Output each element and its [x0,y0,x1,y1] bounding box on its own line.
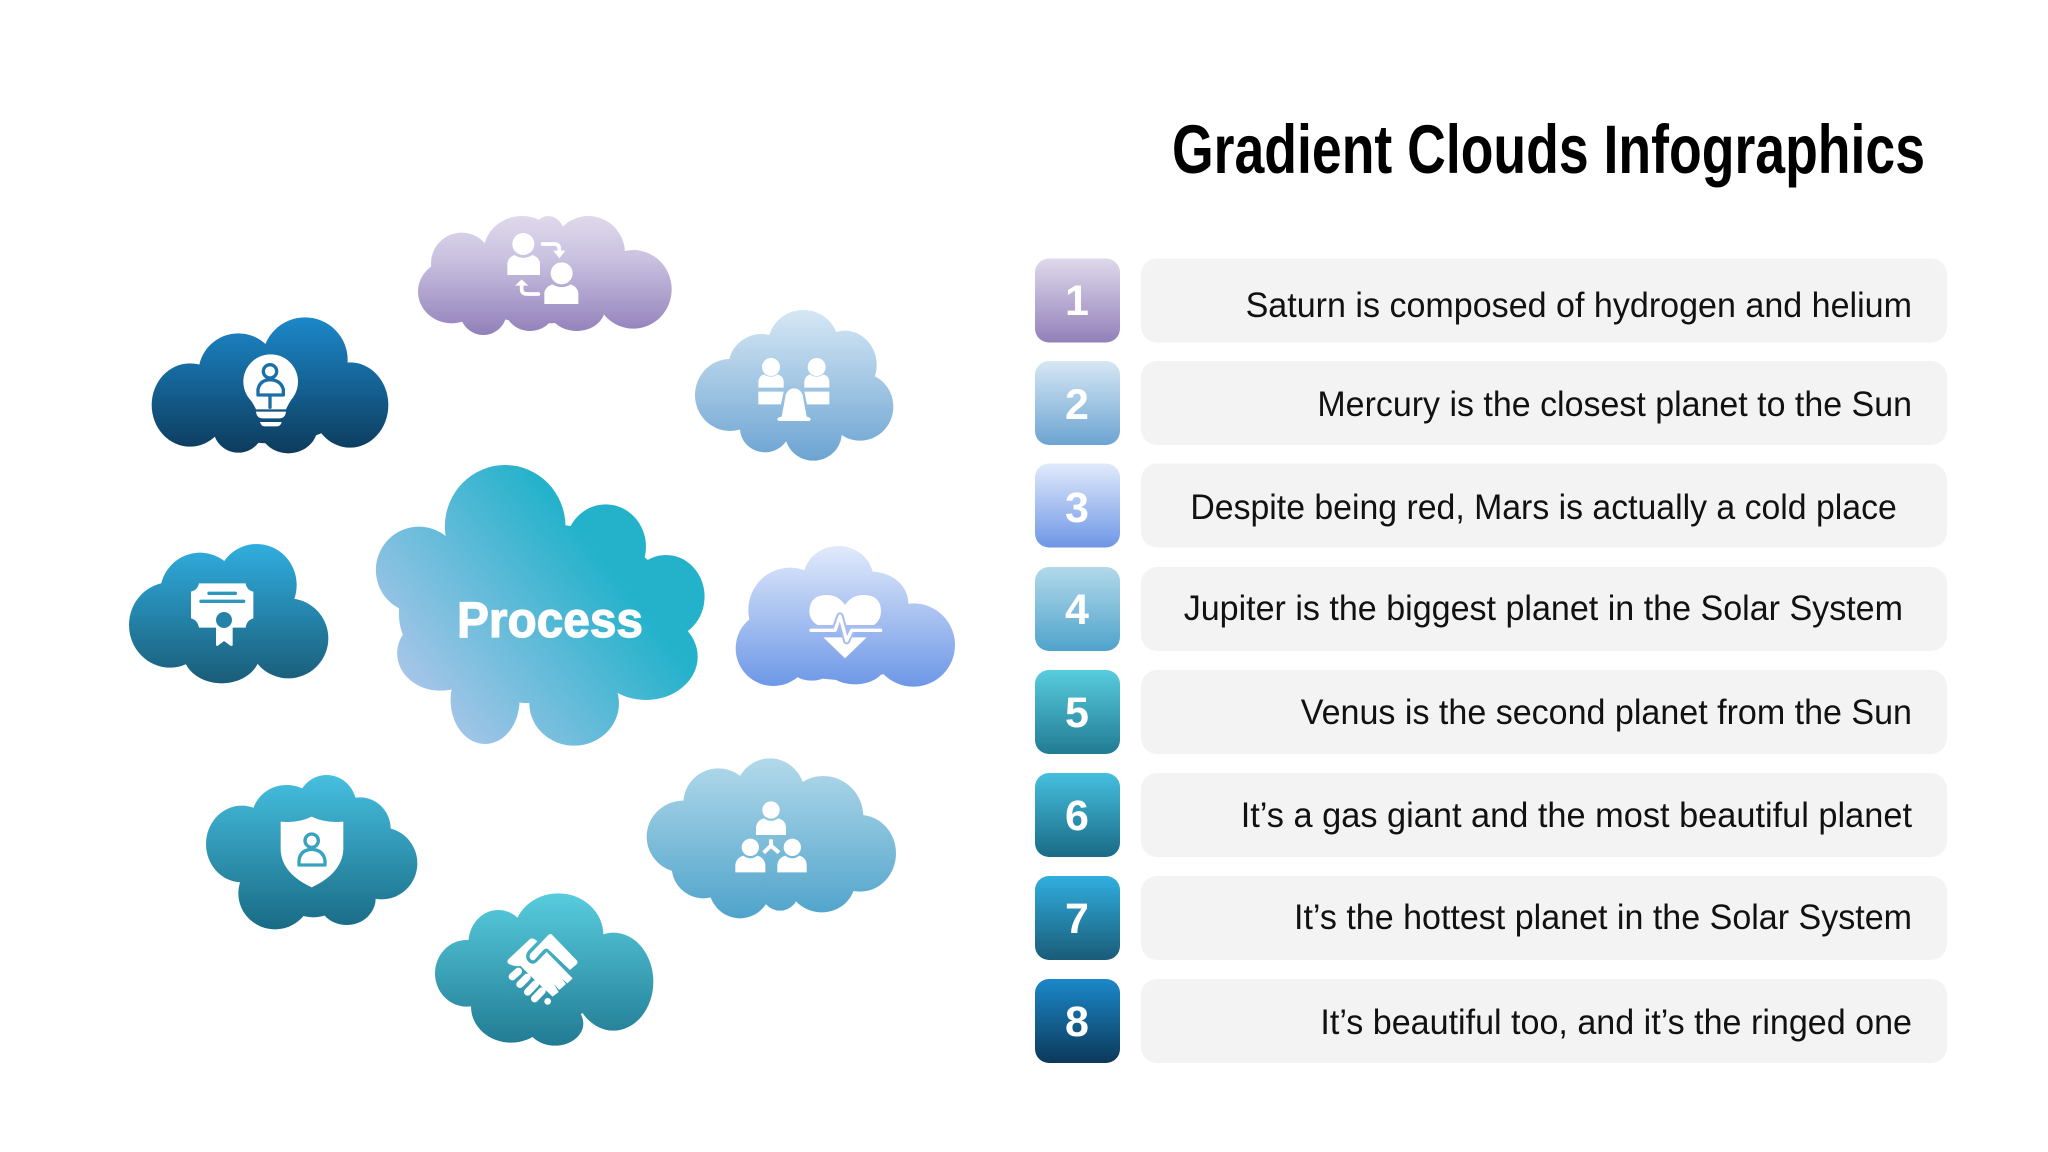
cloud: pale blue with balance icon [695,310,893,461]
number badge 8: 8 [1065,998,1089,1046]
cloud: aqua with handshake icon [435,893,653,1046]
row 4 [1035,567,1947,651]
number badge 2 [1035,361,1120,445]
row 1 [1035,258,1947,342]
icon: certificate [191,583,253,646]
icon: team hierarchy [735,801,807,872]
number badge 3: 3 [1065,484,1089,532]
number badge 5: 5 [1065,689,1089,737]
row 8 [1035,979,1947,1063]
row 2 [1035,361,1947,445]
icon: two people on a balance [758,358,829,421]
row 3 [1035,464,1947,548]
cloud: blue-teal with shield icon [206,775,417,929]
number badge 6 [1035,773,1120,857]
row 8 text: It’s beautiful too, and it’s the ringed one [1320,1003,1912,1042]
cloud: central process [376,465,705,746]
cloud: sky blue with org chart icon [647,758,896,918]
number badge 7: 7 [1065,895,1089,943]
cloud: periwinkle with heart icon [736,546,955,687]
number badge 8 [1035,979,1120,1063]
icon: heart with pulse [809,595,881,658]
number badge 6: 6 [1065,792,1089,840]
icon: people exchange [507,233,578,304]
number badge 2: 2 [1065,381,1089,429]
icon: lightbulb person [243,354,298,426]
central label: Process [457,592,643,648]
row 5 [1035,670,1947,754]
number badge 4 [1035,567,1120,651]
number badge 5 [1035,670,1120,754]
icon: shield with person [281,817,343,887]
row 3 text: Despite being red, Mars is actually a cold place [1190,488,1897,527]
number badge 4: 4 [1065,586,1089,634]
cloud: purple (top) with exchange icon [418,216,672,335]
number badge 1 [1035,258,1120,342]
number badge 1: 1 [1065,277,1089,325]
number badge 3 [1035,464,1120,548]
row 6 text: It’s a gas giant and the most beautiful planet [1241,796,1912,835]
cloud: teal with certificate icon [129,544,328,683]
row 6 [1035,773,1947,857]
icon: handshake [507,934,578,1005]
row 5 text: Venus is the second planet from the Sun [1301,693,1912,732]
row 7 [1035,876,1947,960]
row 7 text: It’s the hottest planet in the Solar System [1294,898,1912,937]
cloud: dark blue with lightbulb icon [152,317,388,453]
row 1 text: Saturn is composed of hydrogen and helium [1246,286,1912,325]
row 4 text: Jupiter is the biggest planet in the Solar System [1184,589,1903,628]
number badge 7 [1035,876,1120,960]
row 2 text: Mercury is the closest planet to the Sun [1317,385,1912,424]
